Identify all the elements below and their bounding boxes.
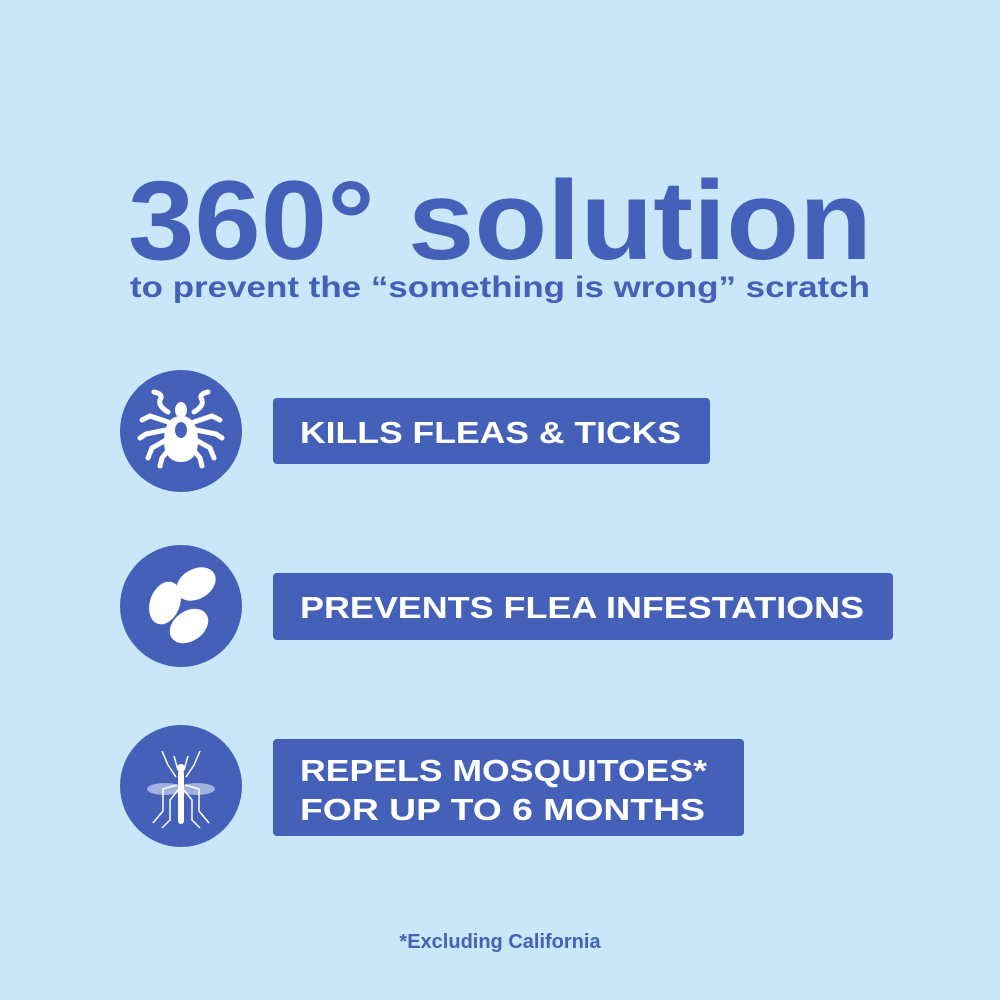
box: prevents flea infestations: PREVENTS FLEA INFESTATIONS	[300, 590, 864, 625]
box: repels mosquitoes: FOR UP TO 6 MONTHS	[300, 792, 705, 827]
title: 360° solution	[128, 158, 872, 283]
icon: flea eggs	[120, 545, 242, 667]
box: kills fleas & ticks: KILLS FLEAS & TICKS	[300, 415, 681, 450]
box: kills fleas & ticks	[273, 398, 710, 464]
box: repels mosquitoes: REPELS MOSQUITOES*	[300, 753, 708, 788]
icon: mosquito	[120, 725, 242, 847]
box: prevents flea infestations	[273, 573, 893, 640]
box: repels mosquitoes	[273, 739, 744, 836]
icon: tick	[120, 370, 242, 492]
footnote: *Excluding California	[399, 931, 601, 953]
subtitle: to prevent the “something is wrong” scratch	[130, 271, 870, 304]
